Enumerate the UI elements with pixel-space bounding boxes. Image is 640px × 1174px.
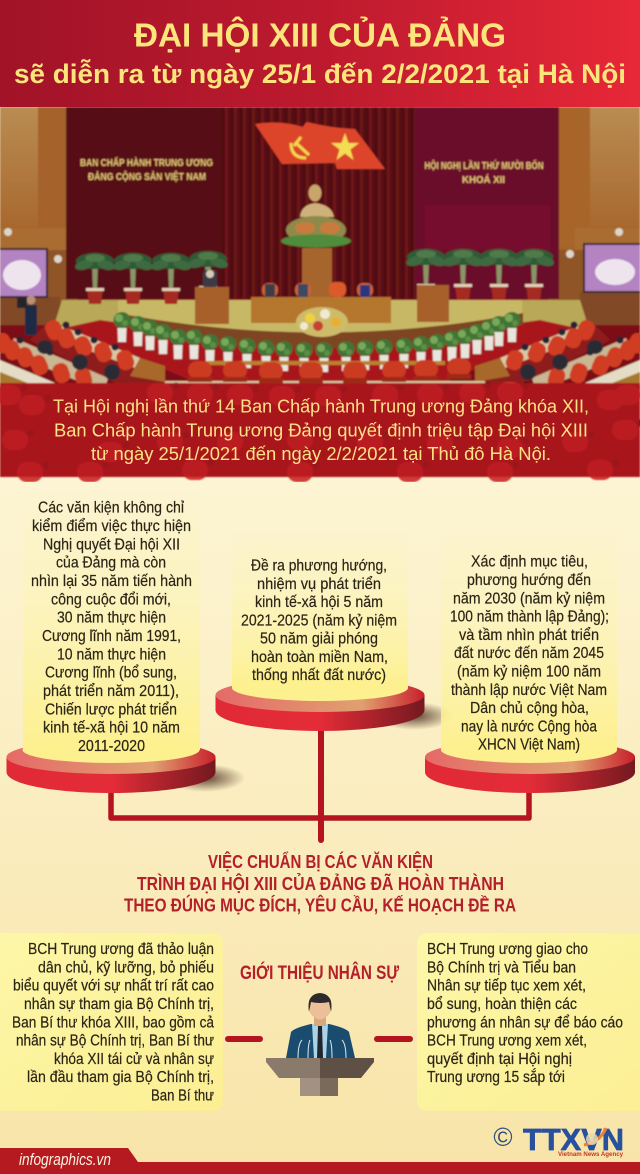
- banner text right second line: KHOÁ XII: [462, 173, 505, 186]
- footer bar: [0, 1148, 640, 1174]
- subtitle: sẽ diễn ra từ ngày 25/1 đến 2/2/2021 tại Hà Nội: [14, 58, 626, 89]
- photo caption: [53, 396, 589, 464]
- right text box: Bộ Chính trị và Tiểu ban: [427, 958, 576, 976]
- text column left: Nghị quyết Đại hội XII: [43, 536, 180, 553]
- right wall: [548, 107, 640, 342]
- party and national flag: [255, 122, 385, 169]
- photo caption: từ ngày 25/1/2021 đến ngày 2/2/2021 tại Thủ đô Hà Nội.: [91, 443, 551, 464]
- text column centre: kinh tế-xã hội 5 năm: [255, 594, 383, 611]
- text column left: phát triển năm 2011),: [43, 682, 179, 700]
- text column left: Chiến lược phát triển: [45, 700, 177, 718]
- right text box: quyết định tại Hội nghị: [427, 1051, 572, 1068]
- right text box: bổ sung, hoàn thiện các: [427, 995, 577, 1013]
- logo: TTXVN: TTXVN: [523, 1122, 624, 1157]
- text column right: phương hướng đến: [467, 572, 591, 589]
- text column left: kiểm điểm việc thực hiện: [32, 517, 191, 535]
- connector lines: [111, 728, 529, 840]
- right text box: BCH Trung ương xem xét,: [427, 1033, 587, 1050]
- security cameras and clocks: [4, 228, 623, 263]
- podium right: [417, 285, 449, 322]
- pedestal left: [6, 490, 245, 793]
- red overlay: [0, 383, 640, 477]
- left palms: [74, 251, 229, 304]
- text column right: thành lập nước Việt Nam: [451, 682, 607, 699]
- row of plants: [114, 312, 520, 372]
- left delegate seating: [0, 318, 190, 392]
- dash connector left: [225, 1036, 263, 1042]
- stage: [52, 300, 590, 340]
- statue pedestal: [302, 248, 332, 298]
- text column right: năm 2030 (năm kỷ niệm: [453, 590, 605, 607]
- text column right: Dân chủ cộng hòa,: [470, 700, 589, 717]
- text column left: 30 năm thực hiện: [57, 610, 166, 627]
- right text box: Nhân sự tiếp tục xem xét,: [427, 978, 586, 995]
- left text box: dân chủ, kỹ lưỡng, bỏ phiếu: [38, 959, 214, 976]
- text column left: Các văn kiện không chỉ: [38, 500, 184, 517]
- header band: [0, 0, 640, 107]
- centre curtain: [220, 107, 415, 299]
- Ho Chi Minh bust: [300, 184, 334, 217]
- text column centre: Đề ra phương hướng,: [251, 558, 387, 575]
- star: [331, 133, 359, 160]
- icon: speaker at lectern: [266, 993, 374, 1096]
- left text box: Ban Bí thư: [151, 1088, 214, 1104]
- dash connector right: [374, 1036, 413, 1042]
- text column left: 10 năm thực hiện: [57, 646, 166, 663]
- logo: TTXVN: Vietnam News Agency: [558, 1151, 623, 1158]
- left text box: [0, 933, 223, 1111]
- text column right: 100 năm thành lập Đảng);: [450, 609, 609, 626]
- text column left: 2011-2020: [78, 738, 145, 755]
- text column left: của Đảng mà còn: [56, 555, 166, 572]
- text column right: đất nước đến năm 2045: [454, 645, 604, 662]
- photo caption: Ban Chấp hành Trung ương Đảng quyết định triệu tập Đại hội XIII: [54, 420, 588, 440]
- photo: conference hall: [0, 107, 640, 482]
- text column left: kinh tế-xã hội 10 năm: [43, 720, 180, 737]
- personnel heading: GIỚI THIỆU NHÂN SỰ: [240, 962, 399, 984]
- text column centre: hoàn toàn miền Nam,: [251, 649, 388, 666]
- presidium table: [251, 297, 391, 323]
- left text box: biểu quyết với sự nhất trí rất cao: [13, 977, 214, 995]
- text column right: Xác định mục tiêu,: [471, 554, 588, 571]
- banner text left second line: ĐẢNG CỘNG SẢN VIỆT NAM: [88, 170, 206, 183]
- title: ĐẠI HỘI XIII CỦA ĐẢNG: [134, 16, 506, 54]
- text column right: nay là nước Cộng hòa: [461, 718, 597, 735]
- left wall: [0, 107, 78, 342]
- text column centre: 2021-2025 (năm kỷ niệm: [241, 612, 397, 630]
- text column right: [450, 554, 609, 754]
- left text box: lần đầu tham gia Bộ Chính trị,: [27, 1069, 214, 1086]
- photo caption: Tại Hội nghị lần thứ 14 Ban Chấp hành Trung ương Đảng khóa XII,: [53, 396, 589, 416]
- text column right: và tầm nhìn phát triển: [459, 626, 599, 644]
- text column centre: thống nhất đất nước): [252, 667, 386, 684]
- section heading: TRÌNH ĐẠI HỘI XIII CỦA ĐẢNG ĐÃ HOÀN THÀNH: [137, 873, 504, 894]
- right banner panel: [415, 107, 559, 299]
- bouquet: [296, 307, 348, 337]
- text column right: (năm kỷ niệm 100 năm: [457, 664, 601, 680]
- left text box: khóa XII tái cử và nhân sự: [54, 1051, 214, 1068]
- centre desk: [165, 361, 485, 384]
- text column left: công cuộc đổi mới,: [51, 590, 171, 608]
- right text box: Trung ương 15 sắp tới: [427, 1067, 565, 1086]
- hammer and sickle: [291, 137, 309, 158]
- logo: TTXVN: ©: [493, 1122, 513, 1152]
- banner text left: BAN CHẤP HÀNH TRUNG ƯƠNG: [80, 156, 213, 169]
- right delegate seating: [450, 318, 640, 392]
- right palms: [405, 249, 555, 300]
- presidium seats: [262, 282, 373, 297]
- text column left: [31, 500, 192, 755]
- pedestal right: [425, 530, 635, 793]
- text column left: Cương lĩnh năm 1991,: [42, 628, 181, 645]
- carpet: [0, 320, 640, 385]
- section heading: VIỆC CHUẨN BỊ CÁC VĂN KIỆN: [208, 851, 433, 872]
- left banner panel: [66, 107, 221, 299]
- stage edge: [117, 313, 523, 348]
- lower seating rows: [0, 382, 640, 482]
- footer site name: infographics.vn: [19, 1150, 111, 1169]
- right text box: [417, 933, 640, 1111]
- right text box: BCH Trung ương giao cho: [427, 941, 588, 958]
- text column centre: 50 năm giải phóng: [260, 631, 378, 648]
- right screen: [583, 243, 640, 293]
- section heading: THEO ĐÚNG MỤC ĐÍCH, YÊU CẦU, KẾ HOẠCH ĐỀ RA: [124, 895, 516, 916]
- text column centre: nhiệm vụ phát triển: [257, 575, 381, 593]
- cameraman: [17, 296, 37, 335]
- left text box: nhân sự Bộ Chính trị, Ban Bí thư: [16, 1033, 214, 1050]
- section heading: [124, 851, 516, 916]
- banner text right: HỘI NGHỊ LẦN THỨ MƯỜI BỐN: [424, 158, 544, 172]
- left screen: [0, 248, 48, 298]
- text column left: nhìn lại 35 năm tiến hành: [31, 573, 192, 590]
- text column centre: [241, 558, 397, 684]
- text column left: Cương lĩnh (bổ sung,: [45, 664, 177, 682]
- text column right: XHCN Việt Nam): [478, 737, 580, 754]
- podium left: [195, 270, 229, 324]
- centre front chairs: [188, 358, 471, 383]
- left text box: Ban Bí thư khóa XIII, bao gồm cả: [12, 1014, 214, 1031]
- flower arrangement: [281, 216, 351, 248]
- left text box: BCH Trung ương đã thảo luận: [28, 941, 214, 958]
- left text box: nhân sự tham gia Bộ Chính trị,: [24, 996, 214, 1013]
- pedestal centre: [216, 530, 454, 731]
